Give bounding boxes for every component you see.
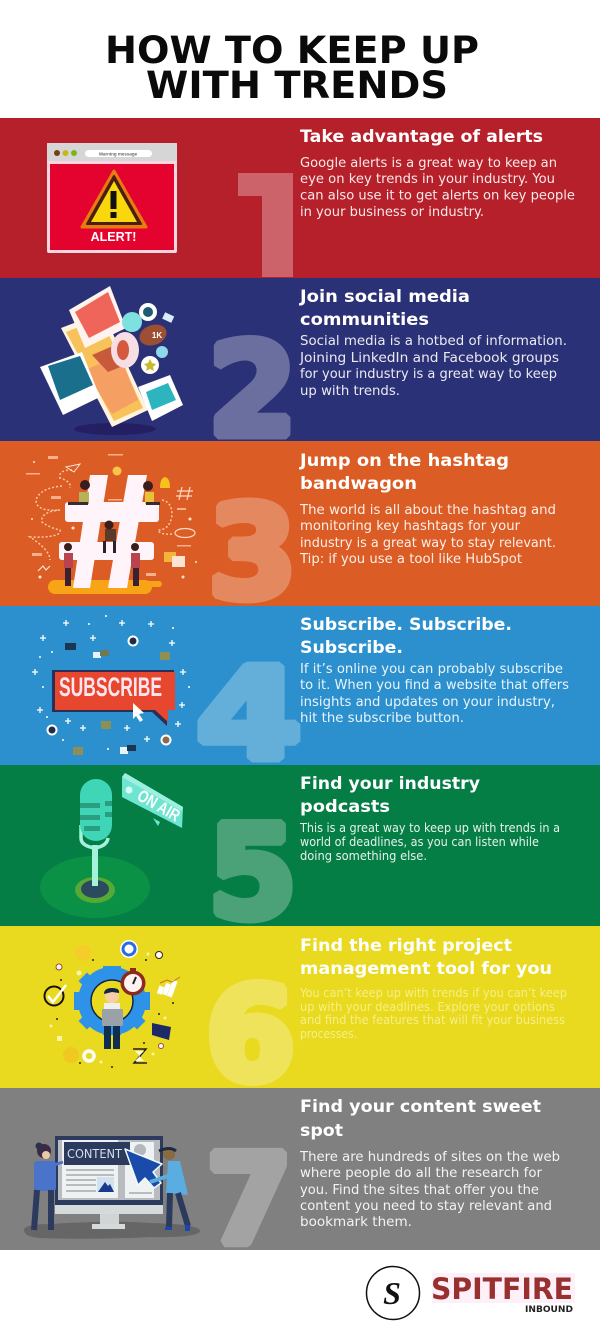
panel: 5 podcasts (0, 765, 600, 948)
heading 3 (299, 451, 509, 494)
text block 6 (299, 985, 567, 1041)
text block 2: Joining LinkedIn and Facebook groups (299, 350, 559, 366)
icon: on air microphone (40, 773, 183, 918)
panel: 2 social media (0, 278, 600, 466)
text block 5 (299, 820, 560, 863)
big number 3: 3 (208, 479, 297, 628)
icon: hashtag with people (26, 454, 197, 594)
text block 1: Google alerts is a great way to keep an (300, 155, 557, 171)
text block 5: This is a great way to keep up with trends in a (299, 820, 560, 835)
big number 2: 2 (208, 317, 297, 466)
text block 4: to it. When you find a website that offers (300, 677, 569, 693)
heading 3: bandwagon (300, 474, 417, 494)
icon: gear and worker (44, 940, 180, 1068)
icon: subscribe button: SUBSCRIBE (59, 672, 162, 702)
text block 1 (300, 155, 575, 220)
text block 4 (300, 661, 569, 726)
heading 5 (300, 774, 480, 817)
icon: alert browser window: Warning message (99, 152, 138, 156)
icon: alert browser window (47, 143, 177, 253)
text block 6: You can’t keep up with trends if you can’t keep (299, 985, 567, 1000)
heading 2: Join social media (299, 287, 470, 307)
text block 7: There are hundreds of sites on the web (299, 1149, 560, 1165)
text block 6: up with your deadlines. Explore your options (300, 999, 555, 1014)
heading 5: Find your industry (300, 774, 480, 794)
icon: social media cards (40, 286, 183, 435)
text block 7: content you need to stay relevant and (300, 1198, 552, 1214)
big number 7: 7 (206, 1129, 292, 1273)
heading 7: Find your content sweet (300, 1097, 541, 1117)
text block 4: hit the subscribe button. (300, 710, 464, 726)
icon: on air microphone: ON AIR (134, 786, 183, 825)
text block 2: Social media is a hotbed of information. (300, 333, 567, 349)
text block 1: can also use it to get alerts on key people (300, 188, 575, 204)
heading 3: Jump on the hashtag (299, 451, 509, 471)
text block 5: world of deadlines, as you can listen while (300, 834, 539, 849)
text block 3: monitoring key hashtags for your (300, 518, 520, 534)
title: WITH TRENDS (146, 64, 448, 107)
heading 4: Subscribe. Subscribe. (300, 615, 512, 635)
text block 5: doing something else. (300, 848, 427, 863)
heading 6: Find the right project (300, 936, 512, 956)
text block 6: processes. (300, 1026, 357, 1041)
heading 2 (299, 287, 470, 330)
heading 4 (300, 615, 512, 658)
text block 3: The world is all about the hashtag and (299, 502, 556, 518)
heading 1: Take advantage of alerts (300, 127, 543, 147)
heading 4: Subscribe. (300, 638, 403, 658)
logo: Spitfire Inbound (366, 1266, 575, 1320)
heading 5: podcasts (300, 797, 390, 817)
text block 4: insights and updates on your industry, (300, 694, 555, 710)
panel: 7 content (0, 1088, 600, 1273)
big number 5: 5 (208, 799, 297, 948)
heading 7: spot (300, 1121, 343, 1141)
big number 6: 6 (206, 961, 295, 1110)
text block 2: for your industry is a great way to keep (300, 366, 557, 382)
heading 6: management tool for you (300, 959, 552, 979)
wordmark: SPITFIRE (431, 1272, 573, 1306)
text block 3: industry is a great way to stay relevant. (300, 535, 556, 551)
text block 1: in your business or industry. (300, 204, 484, 220)
panel: 4 subscribe (0, 606, 600, 788)
icon: content monitor with people (24, 1136, 200, 1239)
icon: alert browser window: ALERT! (91, 230, 136, 244)
text block 7 (299, 1149, 560, 1230)
text block 3 (299, 502, 556, 567)
icon: circle S mark: S (383, 1275, 401, 1311)
text block 1: eye on key trends in your industry. You (300, 171, 555, 187)
panel: 1 alerts (0, 118, 600, 278)
big number 1: 1 (212, 120, 330, 318)
text block 4: If it’s online you can probably subscribe (300, 661, 563, 677)
icon: subscribe button (32, 615, 190, 755)
text block 7: you. Find the sites that offer you the (300, 1182, 539, 1198)
big number 4: 4 (196, 641, 302, 788)
text block 2: up with trends. (300, 383, 400, 399)
text block 7: where people do all the research for (300, 1165, 542, 1181)
heading 2: communities (300, 310, 429, 330)
icon: social media cards: 1K (152, 331, 162, 340)
title (105, 29, 479, 107)
icon: circle S mark (366, 1266, 420, 1320)
text block 2 (299, 333, 567, 399)
text block 6: and find the features that will fit your business (300, 1012, 565, 1027)
title: HOW TO KEEP UP (105, 29, 479, 72)
text block 3: Tip: if you use a tool like HubSpot (299, 551, 522, 567)
text block 7: bookmark them. (300, 1214, 412, 1230)
panel: 3 hashtag (0, 441, 600, 628)
wordmark: INBOUND (525, 1305, 573, 1315)
panel: 6 project management (0, 926, 600, 1110)
heading 6 (300, 936, 552, 979)
icon: content monitor with people: CONTENT (67, 1147, 123, 1161)
heading 7 (300, 1097, 541, 1141)
